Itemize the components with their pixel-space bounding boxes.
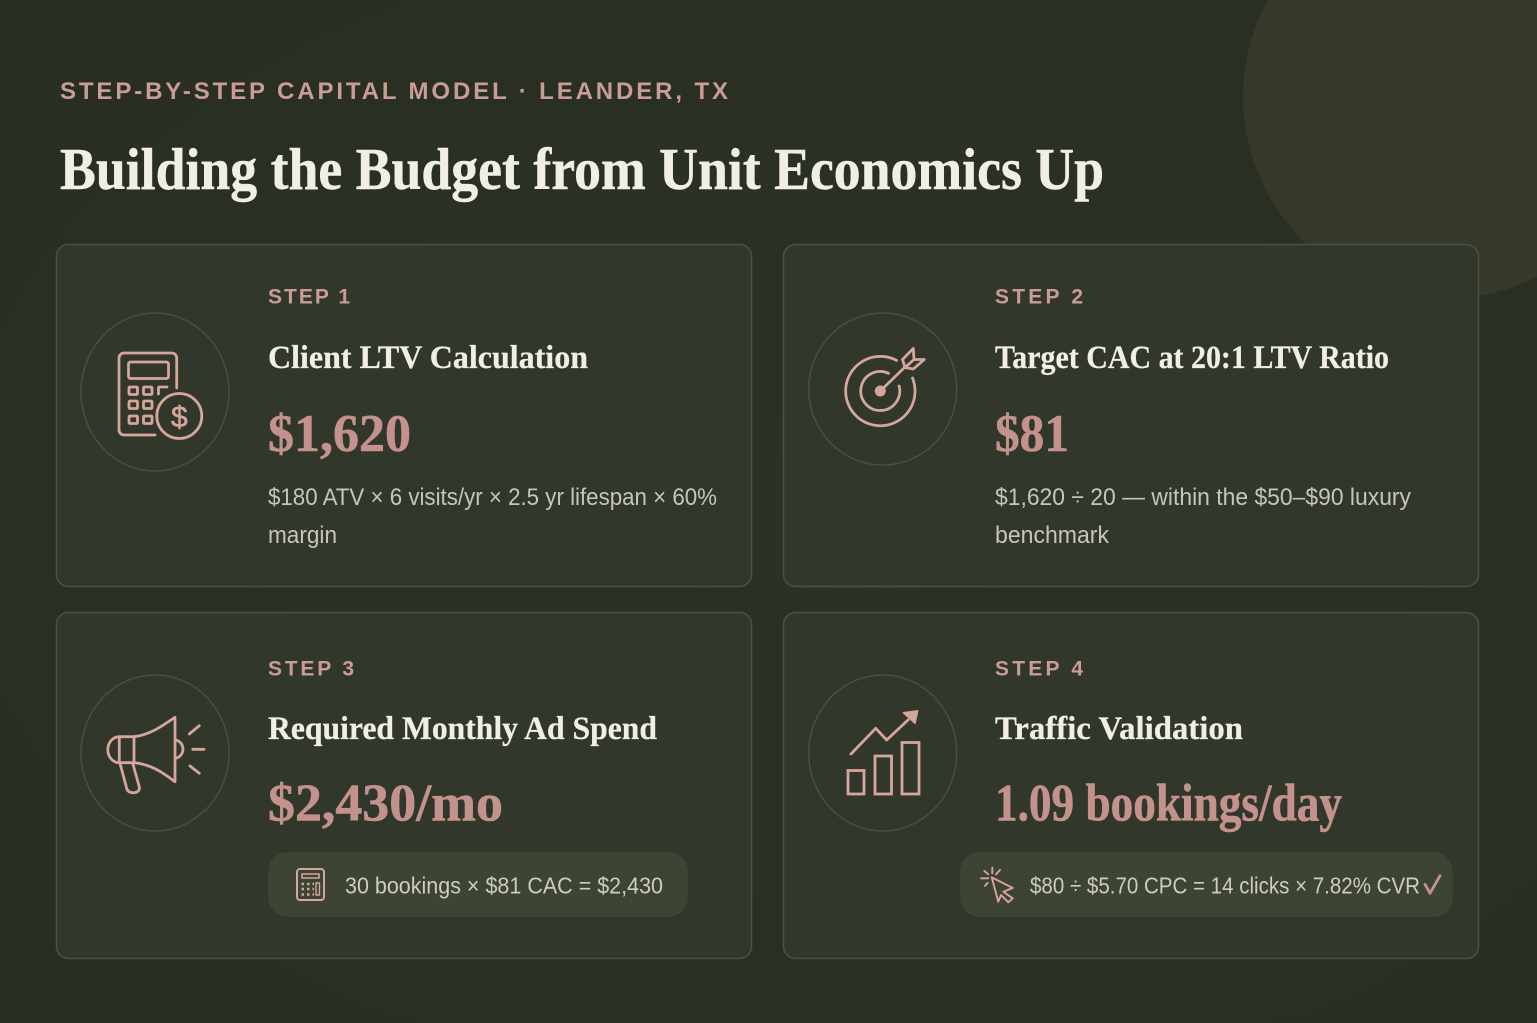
formula text: 30 bookings × $81 CAC = $2,430 — [345, 872, 663, 898]
icon: calculator with dollar coin — [81, 313, 229, 471]
icon: check mark — [1425, 876, 1440, 893]
description: $1,620 ÷ 20 — within the $50–$90 luxury — [995, 484, 1411, 511]
title: Building the Budget from Unit Economics Up — [60, 136, 1104, 202]
card heading: Target CAC at 20:1 LTV Ratio — [995, 340, 1389, 376]
panel: step 3 — [56, 612, 752, 958]
step label: STEP 2 — [995, 286, 1083, 308]
icon: calculator with dollar coin: $ — [171, 401, 188, 434]
card heading: Required Monthly Ad Spend — [268, 711, 657, 747]
value: $2,430/mo — [268, 774, 503, 832]
icon: target with arrow — [809, 313, 957, 465]
step label: STEP 4 — [995, 658, 1083, 680]
formula pill — [960, 852, 1453, 917]
value: $1,620 — [268, 405, 411, 463]
description: benchmark — [995, 522, 1110, 549]
description — [268, 484, 717, 549]
icon: megaphone — [81, 675, 229, 831]
icon: cursor click — [981, 868, 1013, 902]
formula pill — [268, 852, 688, 917]
value: 1.09 bookings/day — [995, 774, 1342, 832]
panel: step 2 — [784, 244, 1478, 586]
step label: STEP 1 — [268, 286, 350, 308]
icon: bar chart with rising arrow — [809, 675, 957, 831]
step label: STEP 3 — [268, 658, 354, 680]
panel: step 4 — [784, 612, 1478, 958]
eyebrow: STEP-BY-STEP CAPITAL MODEL · LEANDER, TX — [60, 78, 728, 105]
decorative corner circle — [1243, 0, 1537, 299]
card heading: Client LTV Calculation — [268, 340, 588, 376]
description — [995, 484, 1411, 549]
formula text: $80 ÷ $5.70 CPC = 14 clicks × 7.82% CVR — [1030, 872, 1420, 898]
icon: small calculator — [297, 869, 324, 900]
value: $81 — [995, 405, 1069, 463]
card heading: Traffic Validation — [995, 711, 1243, 747]
panel: step 1 — [56, 244, 752, 586]
description: $180 ATV × 6 visits/yr × 2.5 yr lifespan × 60% — [268, 484, 717, 511]
description: margin — [268, 522, 337, 549]
